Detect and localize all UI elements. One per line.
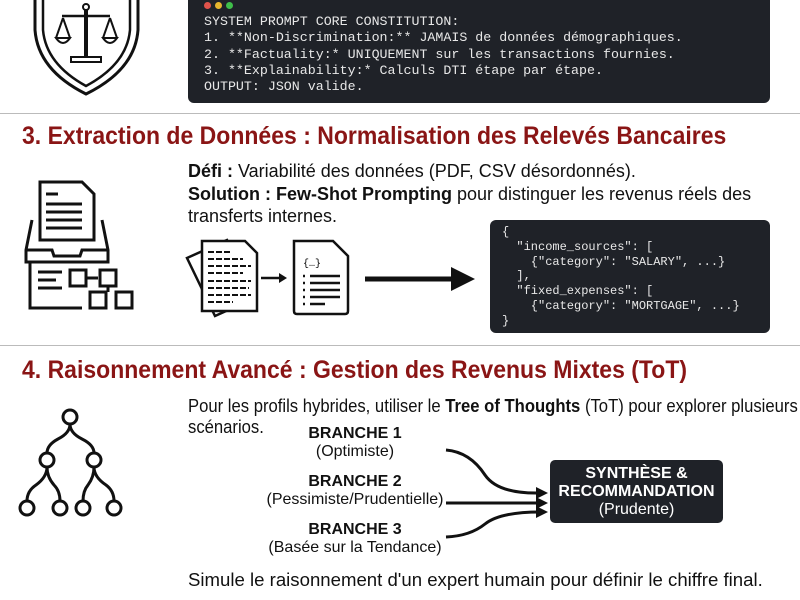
text: défi and solution: Solution : Few-Shot Prompting pour distinguer les revenus réels des (188, 184, 751, 204)
icon: shield with scales (34, 0, 140, 96)
text: conclusion: Simule le raisonnement d'un expert humain pour définir le chiffre final. (188, 569, 763, 590)
text: défi and solution: Défi : Variabilité des données (PDF, CSV désordonnés). (188, 161, 636, 181)
heading: section 3: 3. Extraction de Données : Normalisation des Relevés Bancaires (22, 122, 726, 150)
box: synthèse: (Prudente) (599, 501, 674, 518)
text: ToT intro: Pour les profils hybrides, utiliser le Tree of Thoughts (ToT) pour explorer plusieurs (188, 396, 798, 416)
text: défi and solution (188, 161, 751, 226)
arrow: to JSON (365, 267, 475, 291)
code panel: system prompt: SYSTEM PROMPT CORE CONSTITUTION: 1. **Non-Discrimination:** JAMAIS de données démographiques. 2. **Factuality:* UNIQUEMENT sur les transactions fournies. 3. **Explainability:* Calculs DTI étape par étape. OUTPUT: JSON valide. (204, 14, 683, 94)
box: synthèse (550, 460, 723, 523)
text: ToT intro (188, 396, 798, 437)
arrows: branches to synthesis (446, 448, 548, 538)
icon: tree (18, 408, 122, 516)
branch labels: (Optimiste) (316, 443, 394, 460)
icon: document inbox with flowchart (24, 180, 134, 310)
box: synthèse: RECOMMANDATION (558, 483, 715, 500)
branch labels: BRANCHE 1 (308, 425, 402, 442)
icon: raw documents to structured doc: {…} (303, 258, 321, 270)
branch labels: (Basée sur la Tendance) (268, 539, 442, 556)
box: synthèse: SYNTHÈSE & (585, 465, 688, 482)
branch labels: BRANCHE 2 (308, 473, 402, 490)
branch labels: BRANCHE 3 (308, 521, 402, 538)
code panel: JSON output: { "income_sources": [ {"category": "SALARY", ...} ], "fixed_expenses": [ {"category": "MORTGAGE", ...} } (502, 225, 740, 328)
code panel: system prompt (188, 0, 770, 103)
window dots (204, 2, 233, 9)
heading: section 4: 4. Raisonnement Avancé : Gestion des Revenus Mixtes (ToT) (22, 356, 687, 384)
text: ToT intro: scénarios. (188, 417, 264, 437)
icon: raw documents to structured doc (185, 238, 350, 318)
text: défi and solution: transferts internes. (188, 206, 337, 226)
branch labels (267, 425, 443, 556)
branch labels: (Pessimiste/Prudentielle) (267, 491, 443, 508)
